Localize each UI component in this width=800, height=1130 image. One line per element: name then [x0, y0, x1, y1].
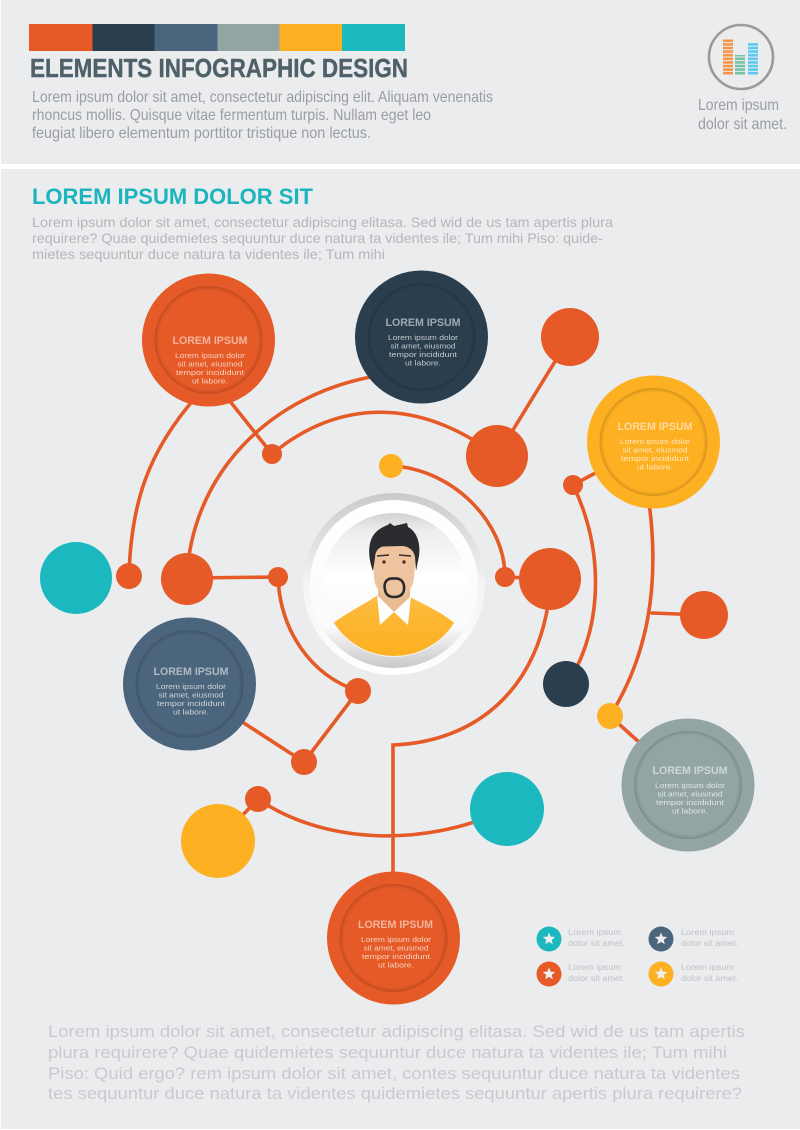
header paragraph: Lorem ipsum dolor sit amet, consectetur adipiscing elit. Aliquam venenatis: [32, 89, 493, 106]
footer paragraph: plura requirere? Quae quidemietes sequuntur duce natura ta videntes ile; Tum mihi: [48, 1043, 727, 1062]
section paragraph: mietes sequuntur duce natura ta videntes ile; Tum mihi: [32, 246, 385, 262]
node: orange small right: [563, 475, 583, 495]
badge: navy top: sit amet, eiusmod: [390, 342, 456, 350]
section paragraph: Lorem ipsum dolor sit amet, consectetur adipiscing elitasa. Sed wid de us tam apertis plura: [32, 214, 613, 230]
badge: orange bottom: sit amet, eiusmod: [364, 944, 428, 952]
badge: grey right: [622, 718, 754, 852]
legend: [536, 926, 738, 986]
panel: header background: [1, 0, 800, 164]
badge: orange bottom: Lorem ipsum dolor: [361, 935, 432, 944]
badge: yellow right: ut labore.: [637, 462, 673, 472]
icon: equalizer badge: [709, 25, 773, 89]
node: orange dot left: [268, 567, 288, 587]
icon caption: [698, 97, 787, 133]
node: orange dot lower: [291, 749, 317, 775]
badge: slate left: tempor incididunt: [157, 699, 225, 708]
node: yellow small: [379, 454, 403, 478]
badge: navy top: ut labore.: [405, 358, 441, 368]
title: ELEMENTS INFOGRAPHIC DESIGN: [30, 53, 408, 83]
badge: navy top: tempor incididunt: [389, 350, 457, 359]
node: orange dot lower centre: [345, 678, 371, 704]
badge: slate left: [123, 618, 256, 750]
badge: orange bottom: tempor incididunt: [362, 952, 430, 961]
badge: orange bottom: [327, 872, 460, 1004]
beard: [385, 578, 404, 597]
badge: yellow right: tempor incididunt: [621, 454, 689, 463]
badge: yellow right: sit amet, eiusmod: [622, 446, 688, 454]
legend: dolor sit amet.: [681, 973, 738, 983]
legend: Lorem ipsum: [681, 962, 734, 972]
node: orange dot upper: [262, 444, 282, 464]
node: teal lower: [470, 772, 544, 846]
section heading: LOREM IPSUM DOLOR SIT: [32, 184, 314, 209]
badge: orange bottom: ut labore.: [378, 960, 414, 970]
face: [374, 546, 416, 596]
legend: dolor sit amet.: [681, 938, 738, 948]
legend: dolor sit amet.: [568, 973, 625, 983]
badge: grey right: sit amet, eiusmod: [658, 790, 722, 798]
node: orange small left: [116, 563, 142, 589]
central avatar: [303, 493, 485, 675]
node: orange top right: [541, 308, 599, 366]
hair: [369, 523, 419, 571]
badge: orange bottom: LOREM IPSUM: [358, 919, 433, 931]
section paragraph: [32, 214, 613, 262]
header paragraph: feugiat libero elementum porttitor tristique non lectus.: [32, 125, 371, 142]
badge: orange top left: LOREM IPSUM: [172, 335, 248, 347]
node: navy: [543, 661, 589, 707]
node: yellow lower left: [181, 804, 255, 878]
node: orange far right: [680, 591, 728, 639]
legend: dolor sit amet.: [568, 938, 625, 948]
connector lines network: [129, 337, 704, 890]
badge: grey right: Lorem ipsum dolor: [655, 781, 726, 790]
badge: yellow right: [587, 376, 720, 508]
footer paragraph: [48, 1022, 745, 1103]
node: teal large left: [40, 542, 112, 614]
footer paragraph: tes sequuntur duce natura ta videntes quidemietes sequuntur apertis plura requirere?: [48, 1084, 742, 1103]
collar: [377, 595, 411, 625]
badge: yellow right: Lorem ipsum dolor: [620, 437, 691, 446]
footer paragraph: Piso: Quid ergo? rem ipsum dolor sit amet, contes sequuntur duce natura ta videntes: [48, 1064, 740, 1083]
legend: Lorem ipsum: [681, 927, 734, 937]
header paragraph: rhoncus mollis. Quisque vitae fermentum turpis. Nullam eget leo: [32, 107, 431, 124]
eyes: [377, 555, 411, 564]
legend: Lorem ipsum: [568, 927, 621, 937]
badge: orange top left: Lorem ipsum dolor: [175, 351, 246, 360]
icon caption: Lorem ipsum: [698, 97, 779, 114]
neck: [378, 590, 410, 613]
badge: navy top: [355, 270, 488, 404]
node: orange dot right of centre: [495, 567, 515, 587]
badge: navy top: Lorem ipsum dolor: [388, 333, 459, 342]
badge: yellow right: LOREM IPSUM: [618, 421, 692, 433]
badge: slate left: Lorem ipsum dolor: [156, 682, 227, 691]
badge: orange top left: tempor incididunt: [176, 368, 244, 377]
badge: orange top left: [142, 274, 275, 406]
header paragraph: [32, 89, 493, 142]
legend: Lorem ipsum: [568, 962, 621, 972]
badge: slate left: sit amet, eiusmod: [158, 690, 224, 700]
node: yellow dot right: [597, 703, 623, 729]
badge: grey right: LOREM IPSUM: [652, 765, 728, 777]
node: orange upper centre: [466, 425, 528, 487]
badge: slate left: LOREM IPSUM: [154, 666, 228, 678]
badge: grey right: ut labore.: [672, 806, 708, 816]
sweater: [334, 595, 454, 656]
section paragraph: requirere? Quae quidemietes sequuntur duce natura ta videntes ile; Tum mihi Piso: quide-: [32, 230, 603, 246]
node: orange right of centre: [519, 548, 581, 610]
icon caption: dolor sit amet.: [698, 116, 787, 133]
badge: navy top: LOREM IPSUM: [386, 317, 460, 329]
badge: slate left: ut labore.: [173, 708, 209, 716]
node: orange dot lower left: [245, 786, 271, 812]
node: orange medium left: [161, 553, 213, 605]
footer paragraph: Lorem ipsum dolor sit amet, consectetur adipiscing elitasa. Sed wid de us tam apertis: [48, 1022, 745, 1041]
badge: orange top left: ut labore.: [192, 376, 228, 386]
badge: orange top left: sit amet, eiusmod: [178, 360, 242, 368]
badge: grey right: tempor incididunt: [656, 798, 724, 807]
colour swatch bar: [29, 24, 405, 51]
